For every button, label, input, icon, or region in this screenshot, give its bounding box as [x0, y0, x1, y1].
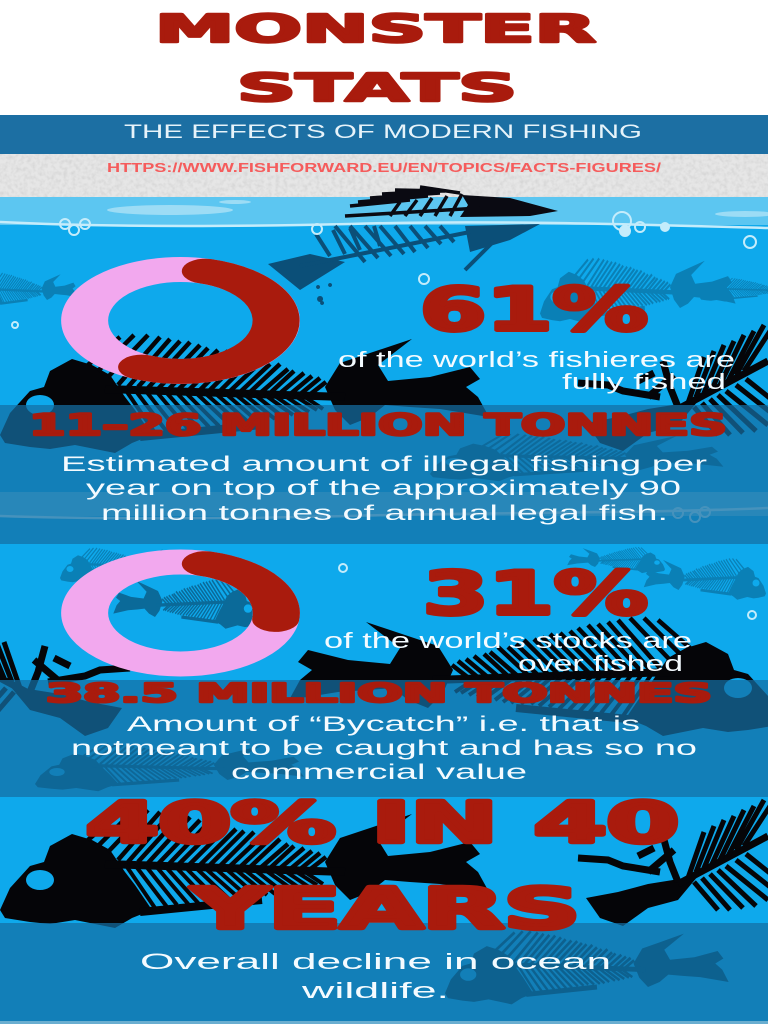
caption: fully fished [338, 347, 735, 394]
stat: 11-26 million tonnes: 11–26 MILLION TONNES [29, 408, 727, 442]
caption: bycatch: notmeant to be caught and has so no [71, 737, 697, 760]
black fish: section five right [578, 800, 768, 926]
bubbles [12, 212, 756, 619]
black fish: section one [0, 335, 489, 453]
band: subtitle [0, 115, 768, 154]
stat: 40% in 40 years: YEARS [190, 877, 580, 942]
bottom strip [0, 1021, 768, 1024]
caption: ocean wildlife: wildlife. [300, 978, 449, 1003]
stat: 40% in 40 years [86, 791, 679, 942]
fish skeleton above the water line [345, 187, 558, 217]
donut chart: 31% [85, 562, 276, 664]
black fish: section five [0, 810, 489, 928]
subtitle: THE EFFECTS OF MODERN FISHING [124, 122, 642, 143]
band: illegal fishing [0, 405, 768, 544]
caption: ocean wildlife: Overall decline in ocean [140, 949, 611, 974]
caption: illegal fishing: Estimated amount of illegal fishing per [61, 453, 707, 476]
paper strip [0, 154, 768, 198]
stat: 40% in 40 years: 40% IN 40 [86, 791, 679, 856]
caption: bycatch: commercial value [231, 761, 527, 784]
title: STATS [237, 66, 517, 110]
faded fish in wildlife band [445, 931, 729, 1004]
caption: ocean wildlife [140, 949, 611, 1003]
black fish: section one right [578, 325, 768, 451]
caption: bycatch: Amount of “Bycatch” i.e. that is [127, 713, 640, 736]
caption: bycatch [71, 713, 697, 784]
donut chart: 61% [85, 270, 276, 372]
stat: 31%: 31% [423, 559, 648, 629]
stat: 38.5 million tonnes: 38.5 MILLION TONNES [46, 679, 712, 709]
caption: over fished [324, 628, 692, 676]
fish reflection below the water line [268, 224, 540, 305]
caption: over fished: over fished [518, 651, 683, 676]
faded background fish [0, 258, 768, 600]
fish inside second donut [113, 579, 260, 629]
caption: over fished: of the world’s stocks are [324, 628, 692, 653]
source url: HTTPS://WWW.FISHFORWARD.EU/EN/TOPICS/FACTS-FIGURES/ [107, 161, 662, 175]
band: bycatch [0, 680, 768, 797]
caption: illegal fishing: year on top of the approximately 90 [86, 477, 681, 500]
caption: fully fished: of the world’s fishieres are [338, 347, 735, 372]
black fish: section three right [289, 618, 768, 736]
title: MONSTER [155, 7, 596, 51]
black fish: section three left [0, 610, 130, 736]
caption: illegal fishing [61, 453, 707, 525]
caption: illegal fishing: million tonnes of annual legal fish. [101, 502, 668, 525]
band: wildlife decline [0, 923, 768, 1021]
title [155, 7, 596, 110]
caption: fully fished: fully fished [562, 369, 726, 394]
faded fish in illegal fishing band [430, 434, 723, 481]
stat: 61%: 61% [420, 275, 648, 345]
faded fish in bycatch band [35, 744, 304, 791]
